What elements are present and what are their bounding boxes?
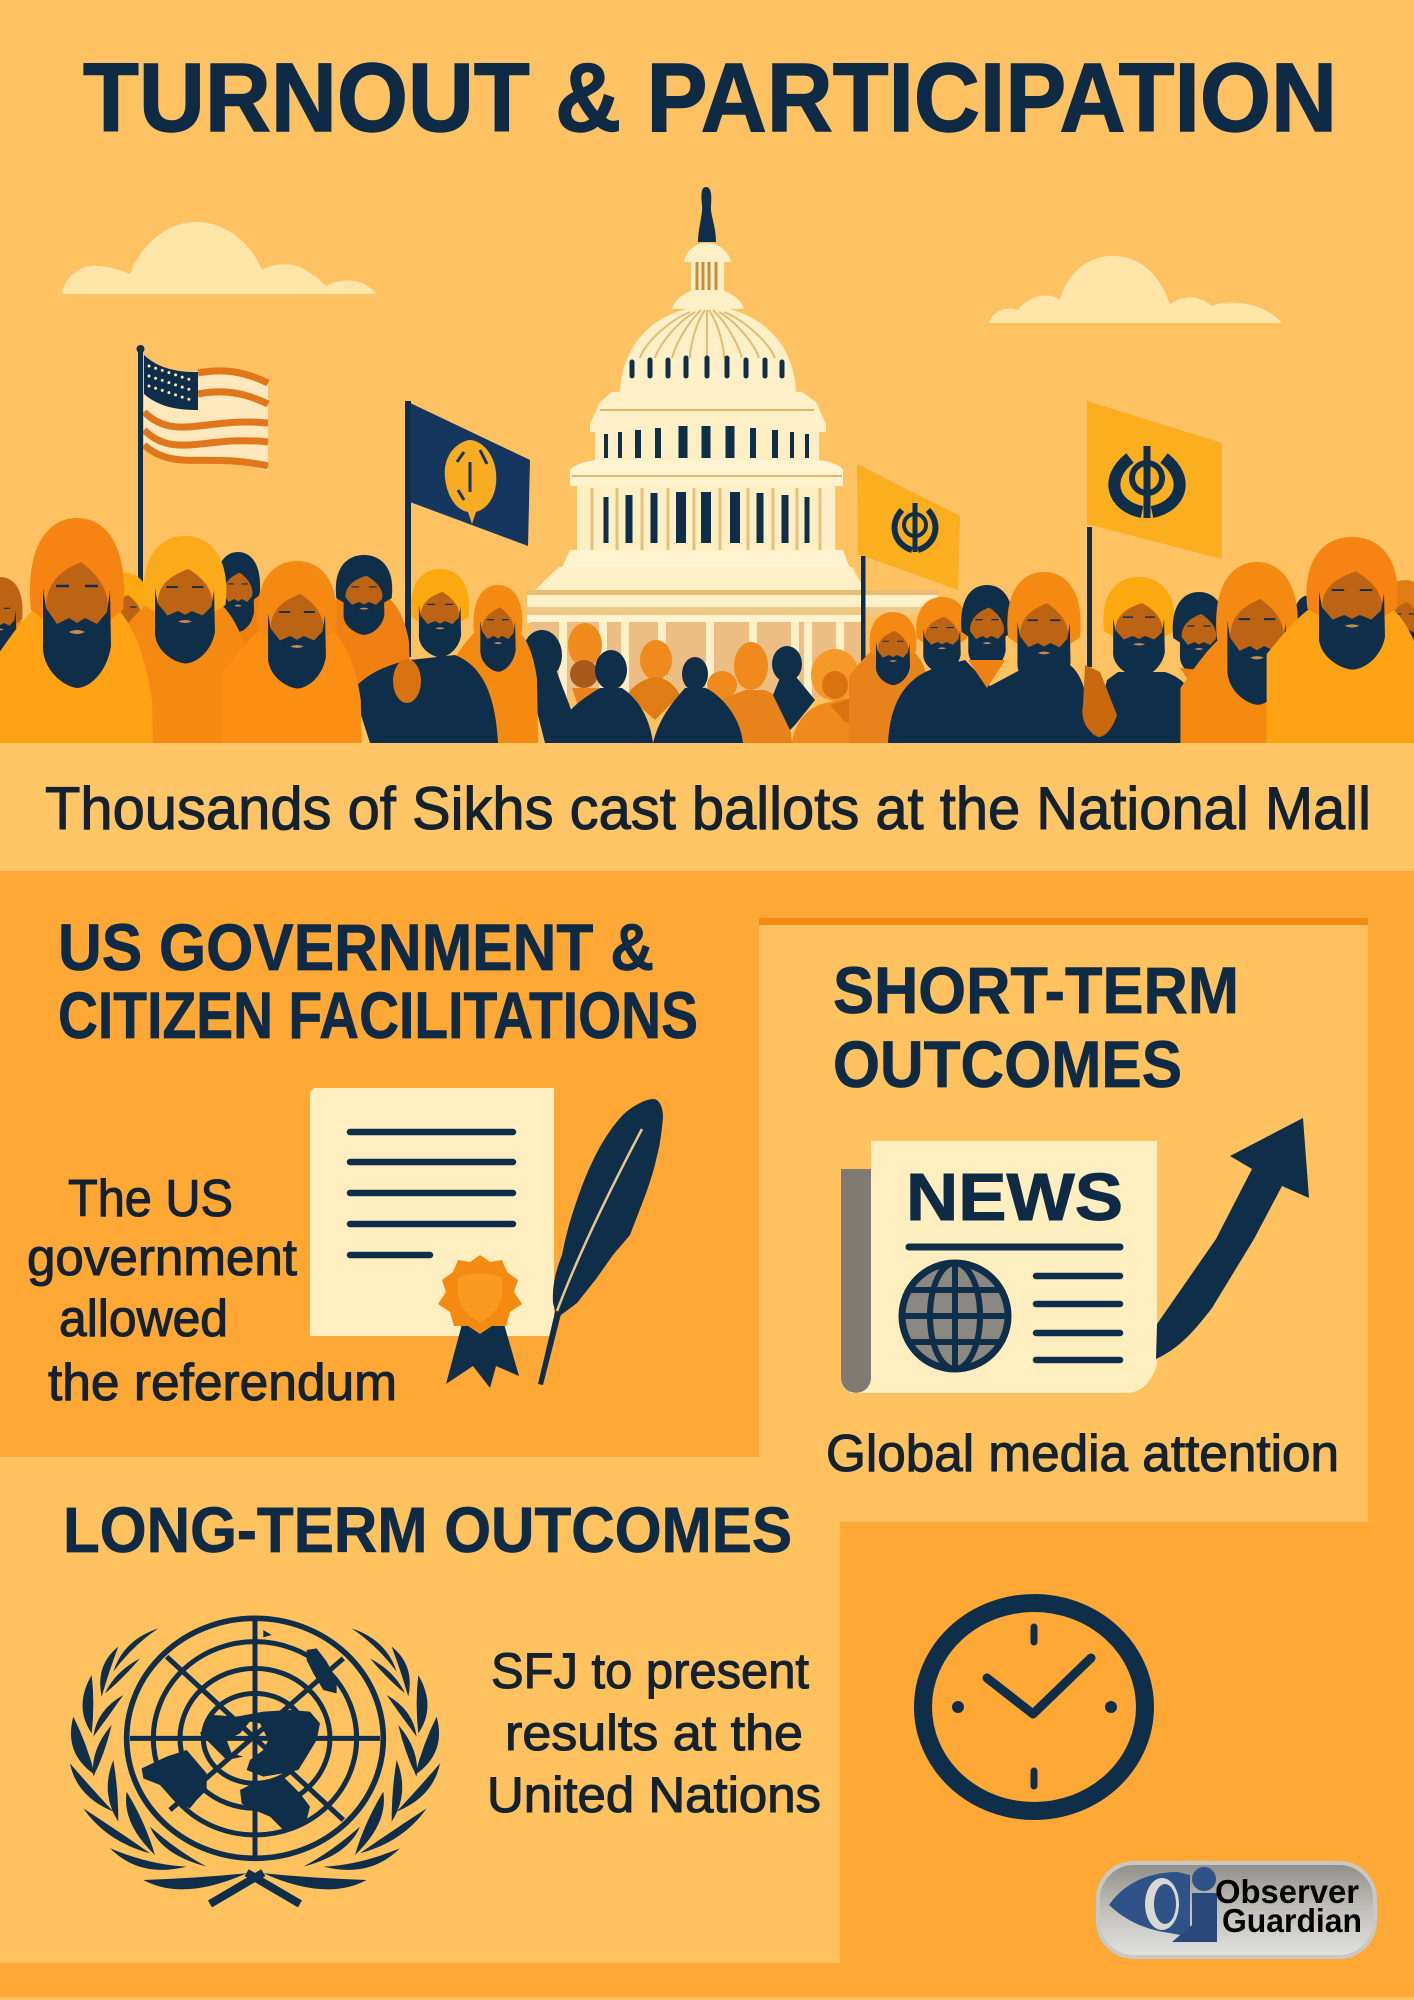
illustration: navy Sikh flag (405, 401, 530, 657)
icon: newspaper: NEWS (906, 1160, 1123, 1235)
text: US government allowed the referendum: allowed (59, 1290, 228, 1348)
heading: US government (58, 910, 698, 1052)
panel: caption band (0, 743, 1414, 871)
bottom edge strip (0, 1997, 1414, 2000)
back row silhouettes (0, 577, 23, 652)
statue on dome (698, 187, 716, 242)
logo: Observer Guardian: Guardian (1222, 1902, 1362, 1939)
text: US government allowed the referendum: The US (68, 1170, 233, 1228)
text: US government allowed the referendum: the referendum (48, 1354, 397, 1412)
navy coats (353, 655, 498, 743)
wreath right (263, 1628, 440, 1889)
illustration: middle saffron flag (857, 464, 960, 696)
caption text: Thousands of Sikhs cast ballots at the National Mall (45, 775, 1371, 842)
heading: long-term outcomes: LONG-TERM OUTCOMES (63, 1494, 792, 1566)
panel: short-term outcomes (759, 918, 1368, 1522)
ribbon crossing (210, 1873, 300, 1904)
middle colonnade (577, 485, 835, 551)
logo: Observer Guardian: Observer (1215, 1873, 1359, 1910)
heading: short-term outcomes (833, 953, 1239, 1101)
rear orange and navy figures (522, 623, 867, 743)
text: SFJ to present results at the United Nations: results at the (505, 1705, 803, 1761)
illustration: left cloud (62, 222, 376, 294)
illustration: crowd (0, 518, 1414, 743)
upper drum (595, 430, 819, 464)
illustration: right saffron flag (1087, 401, 1222, 667)
heading: short-term outcomes: OUTCOMES (833, 1027, 1182, 1101)
panel: long-term outcomes (0, 1457, 840, 1963)
upper band (590, 392, 826, 432)
illustration: US flag (136, 345, 268, 656)
icon: United Nations emblem (70, 1618, 440, 1904)
continents (142, 1630, 337, 1830)
lower colonnade (530, 622, 862, 697)
panel: hero background (0, 0, 1414, 743)
panel: US government and citizen facilitations (0, 871, 760, 1457)
illustration: right cloud (989, 256, 1282, 323)
text: US government allowed the referendum: government (27, 1229, 298, 1287)
logo: Observer Guardian (1098, 1863, 1375, 1957)
dome (620, 306, 796, 392)
icon: newspaper (841, 1141, 1157, 1393)
front row (128, 536, 244, 743)
lantern (684, 243, 731, 294)
icon: certificate (310, 1088, 554, 1388)
text: US government allowed the referendum (27, 1170, 397, 1412)
text: SFJ to present results at the United Nations (487, 1643, 821, 1823)
icon: clock (923, 1603, 1145, 1811)
icon: quill feather (538, 1099, 663, 1385)
base tiers (559, 550, 852, 574)
flag-holding hands (393, 659, 421, 703)
heading: short-term outcomes: SHORT-TERM (833, 953, 1239, 1027)
text: SFJ to present results at the United Nations: United Nations (487, 1767, 821, 1823)
arrow: rising attention (1156, 1118, 1309, 1359)
title: TURNOUT & PARTICIPATION (83, 43, 1337, 152)
icon: globe (902, 1263, 1008, 1369)
illustration: Capitol building (527, 187, 938, 700)
text: global media attention: Global media attention (826, 1425, 1339, 1483)
heading: US government: US GOVERNMENT & (58, 910, 654, 984)
wreath left (70, 1628, 247, 1889)
heading: US government: CITIZEN FACILITATIONS (58, 978, 698, 1052)
text: SFJ to present results at the United Nations: SFJ to present (491, 1643, 809, 1699)
